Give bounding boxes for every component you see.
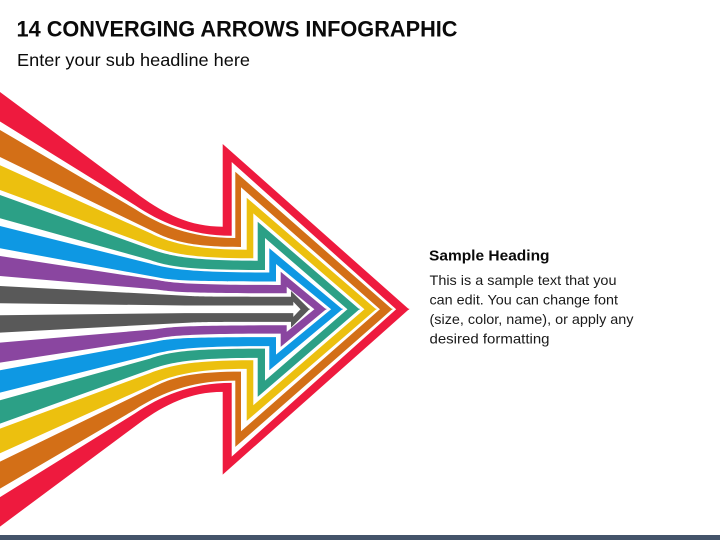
sample body text: (size, color, name), or apply any	[430, 311, 634, 327]
arrow 2: orange	[0, 130, 393, 489]
sample text block	[429, 248, 634, 346]
arrow 3: yellow	[0, 165, 377, 453]
arrow 5: blue	[0, 226, 343, 393]
arrow 4: green	[0, 195, 360, 424]
footer bar	[0, 535, 720, 540]
arrow 1: red	[0, 92, 410, 527]
title: 14 CONVERGING ARROWS INFOGRAPHIC	[16, 17, 458, 42]
sample body text: desired formatting	[430, 330, 550, 346]
arrow 6: purple	[0, 256, 327, 363]
arrow 7: grey	[0, 286, 310, 333]
sample body text	[430, 272, 634, 346]
sample heading: Sample Heading	[429, 248, 550, 264]
subtitle: Enter your sub headline here	[17, 50, 250, 70]
sample body text: This is a sample text that you	[430, 272, 616, 288]
sample body text: can edit. You can change font	[430, 291, 618, 307]
converging arrows graphic	[0, 92, 410, 527]
